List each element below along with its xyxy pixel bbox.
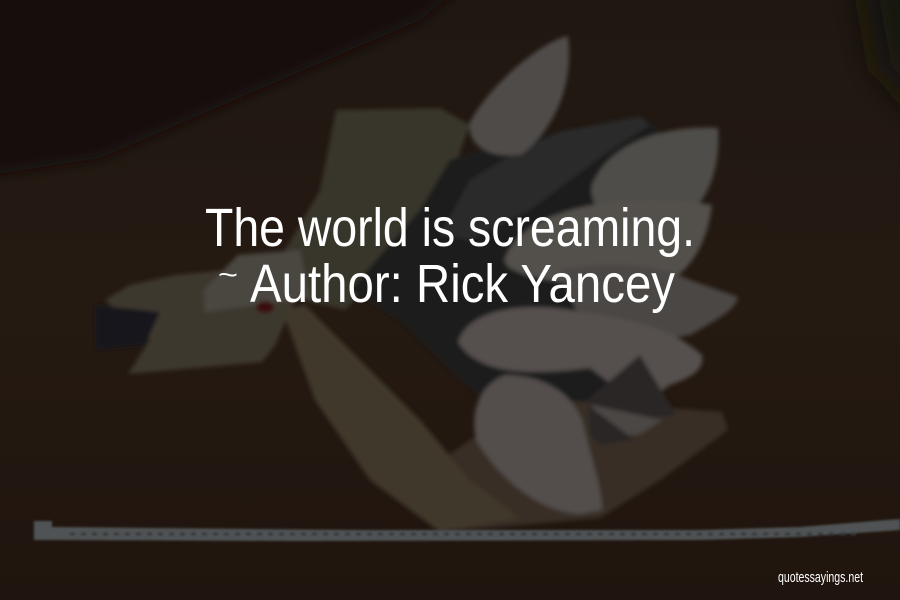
kraft wrapper bowl	[400, 400, 728, 532]
dark inner leaves	[350, 115, 660, 430]
wrapper bow left	[105, 268, 295, 374]
photo: fabric tulip bouquet	[96, 36, 738, 532]
photo: measuring tape	[34, 519, 900, 541]
small leaf	[592, 405, 662, 438]
watermark: quotessayings.net	[778, 569, 864, 586]
quote line: The world is screaming.	[205, 198, 695, 258]
backing cloth	[262, 108, 470, 310]
paper tag	[204, 250, 310, 312]
tulip bud right middle	[505, 200, 712, 290]
tulip bud right upper	[592, 128, 718, 232]
tulip bud right tip	[560, 265, 738, 345]
dark ribbon left	[96, 305, 160, 350]
kraft wrapper front	[282, 305, 520, 532]
tulip bud bottom	[474, 375, 602, 514]
tulip bud top	[470, 36, 569, 155]
red knot	[256, 301, 274, 313]
attribution tilde: ~	[218, 259, 238, 290]
dark triangular leaf	[585, 355, 676, 420]
tulip bud lower centre	[458, 307, 702, 405]
attribution author: Author: Rick Yancey	[250, 254, 675, 314]
